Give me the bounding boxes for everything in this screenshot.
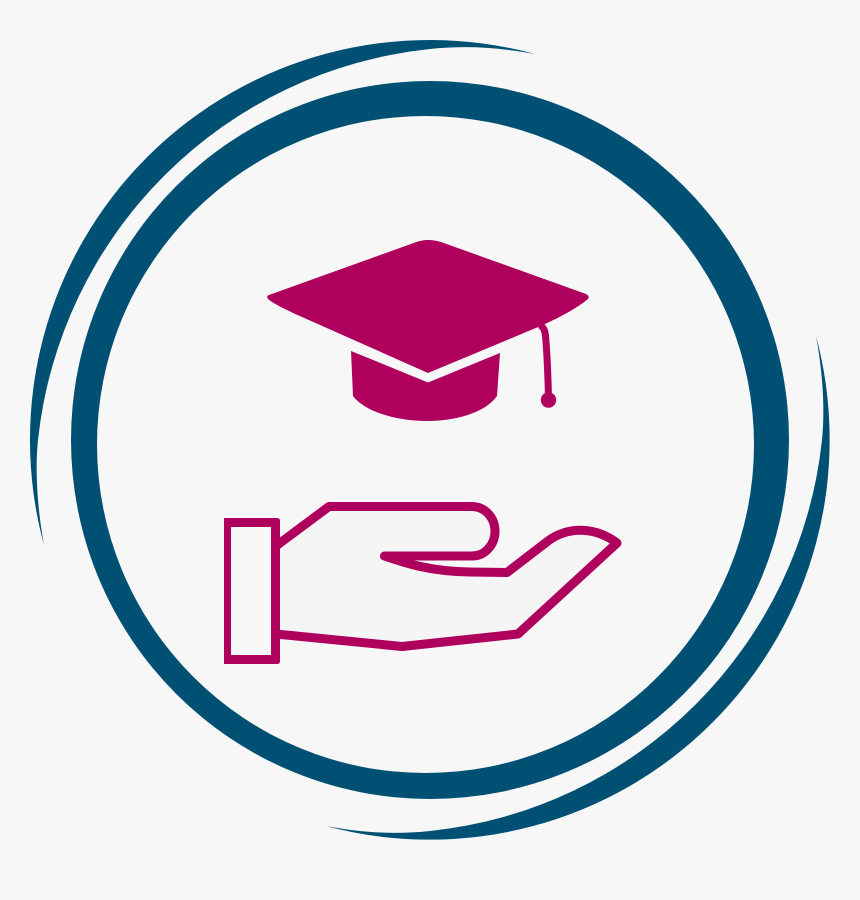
sleeve cuff bbox=[224, 518, 280, 664]
lower right swoosh bbox=[326, 336, 830, 840]
tassel end bbox=[541, 392, 556, 408]
main ring bbox=[71, 81, 789, 799]
icon: graduation cap bbox=[267, 240, 589, 421]
icon: open hand bbox=[224, 506, 617, 664]
upper left swoosh bbox=[30, 40, 535, 545]
tassel cord bbox=[540, 325, 548, 397]
hand outline bbox=[276, 506, 617, 646]
cap base bbox=[351, 351, 500, 421]
cap board bbox=[267, 240, 589, 373]
hand palm fill bbox=[276, 506, 617, 646]
